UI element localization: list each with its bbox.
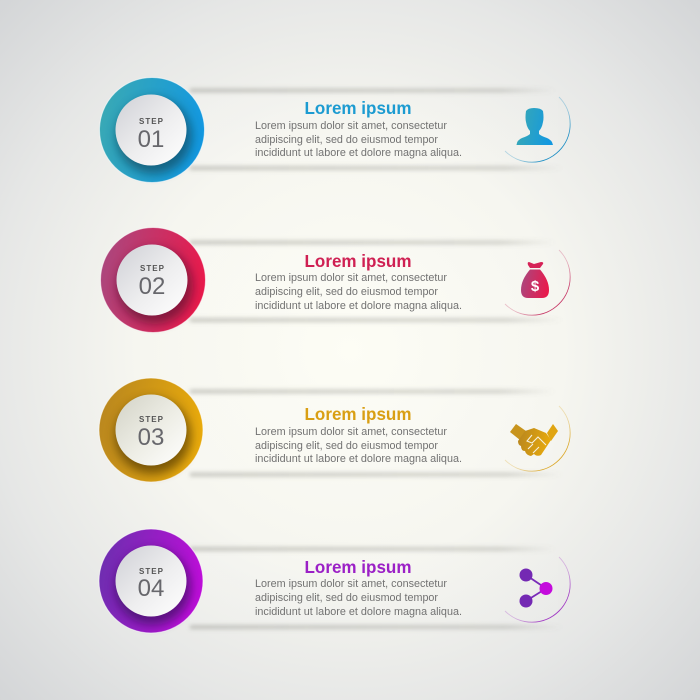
body text: incididunt ut labore et dolore magna aliqua. — [255, 606, 462, 618]
step badge 01: STEP — [139, 117, 164, 126]
step badge 04 — [99, 529, 203, 633]
step badge 02: 02 — [139, 273, 165, 300]
panel: step 04 — [99, 529, 570, 633]
body text: adipiscing elit, sed do eiusmod tempor — [255, 592, 438, 604]
bar: step 04 — [190, 547, 562, 629]
bar: step 02 — [190, 240, 562, 322]
body text — [255, 578, 462, 618]
icon: money bag: $ — [531, 278, 540, 295]
bar: step 03 — [190, 390, 562, 476]
icon arc — [505, 406, 570, 471]
heading: Lorem ipsum — [304, 98, 412, 118]
body text: Lorem ipsum dolor sit amet, consectetur — [255, 426, 447, 438]
body text: adipiscing elit, sed do eiusmod tempor — [255, 286, 438, 298]
icon arc — [505, 250, 570, 315]
panel: step 03 — [99, 378, 570, 482]
heading: Lorem ipsum — [304, 404, 412, 424]
icon: money bag — [521, 262, 549, 298]
heading: Lorem ipsum — [304, 557, 412, 577]
step badge 01: 01 — [138, 126, 164, 153]
icon: handshake — [510, 424, 558, 456]
icon: share nodes — [520, 568, 552, 608]
heading: Lorem ipsum — [304, 251, 412, 271]
body text — [255, 272, 462, 312]
body text: incididunt ut labore et dolore magna aliqua. — [255, 147, 462, 159]
body text: Lorem ipsum dolor sit amet, consectetur — [255, 120, 447, 132]
body text: incididunt ut labore et dolore magna aliqua. — [255, 453, 462, 465]
body text — [255, 120, 462, 159]
step badge 03: 03 — [138, 424, 164, 451]
panel: step 02 — [100, 228, 570, 332]
icon arc — [505, 97, 570, 162]
step badge 01 — [100, 78, 204, 182]
body text: Lorem ipsum dolor sit amet, consectetur — [255, 272, 447, 284]
step badge 02 — [100, 228, 206, 332]
icon arc — [505, 557, 570, 622]
step badge 03 — [99, 378, 203, 482]
icon: person — [516, 108, 553, 145]
panel: step 01 — [100, 78, 570, 182]
bar: step 01 — [190, 88, 562, 170]
step badge 04: STEP — [139, 567, 164, 576]
step badge 02: STEP — [140, 264, 165, 273]
body text: incididunt ut labore et dolore magna aliqua. — [255, 300, 462, 312]
body text: adipiscing elit, sed do eiusmod tempor — [255, 440, 438, 452]
body text: adipiscing elit, sed do eiusmod tempor — [255, 134, 438, 146]
body text: Lorem ipsum dolor sit amet, consectetur — [255, 578, 447, 590]
body text — [255, 426, 462, 465]
step badge 03: STEP — [139, 415, 164, 424]
step badge 04: 04 — [138, 575, 164, 602]
